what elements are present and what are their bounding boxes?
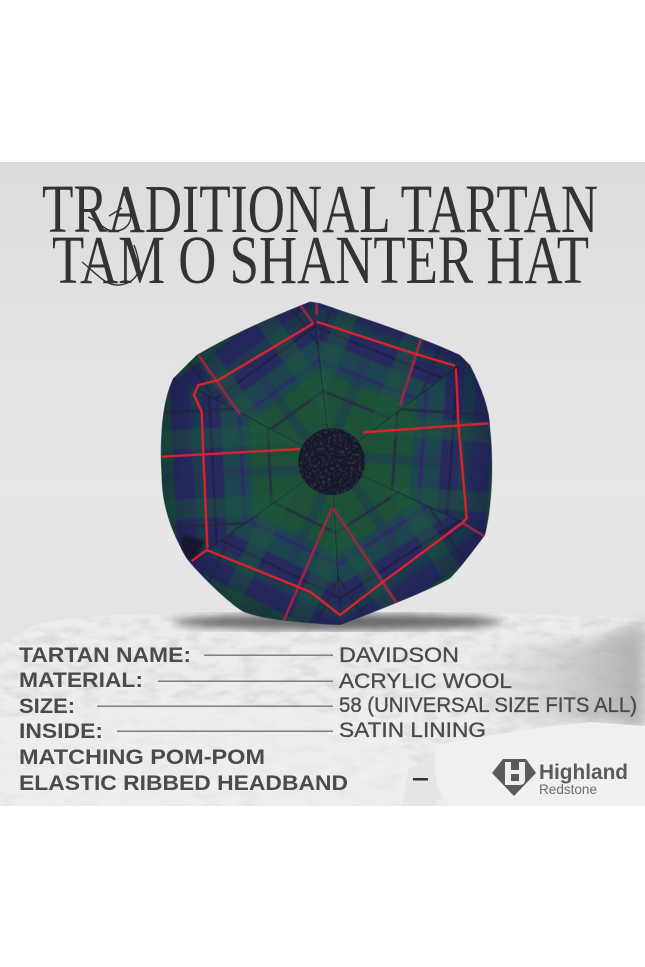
label: inside: INSIDE: <box>19 720 103 743</box>
right shaded rock face <box>501 618 645 726</box>
leader line 2 <box>158 680 333 682</box>
hat shadow <box>173 614 503 630</box>
tartan hat <box>160 302 492 625</box>
wordmark: Highland <box>539 761 628 784</box>
faded red lines <box>198 302 485 622</box>
dark corner <box>180 535 205 562</box>
label: tartan name: TARTAN NAME: <box>19 644 191 667</box>
logo <box>492 759 628 797</box>
sub wordmark: Redstone <box>539 781 597 797</box>
red lines <box>162 322 488 615</box>
leader line 3 <box>97 706 333 707</box>
value: acrylic wool: ACRYLIC WOOL <box>339 670 512 693</box>
edge shading <box>150 295 500 635</box>
title <box>42 171 598 298</box>
feature: headband: ELASTIC RIBBED HEADBAND <box>19 772 348 795</box>
rock texture <box>0 610 645 806</box>
icon: diamond H <box>492 759 536 796</box>
gap between rocks <box>404 771 410 802</box>
panel creases <box>195 322 465 617</box>
front left rock <box>0 700 412 806</box>
pom-pom <box>298 428 365 495</box>
value: Davidson: DAVIDSON <box>339 644 459 667</box>
photo backdrop <box>0 162 645 806</box>
infographic canvas <box>0 162 645 806</box>
stone plinth <box>0 610 645 806</box>
leader line 4 <box>117 730 333 732</box>
feature: pom-pom: MATCHING POM-POM <box>19 746 265 769</box>
label: size: SIZE: <box>19 695 75 718</box>
leader line 1 <box>204 654 333 656</box>
black gap detail <box>413 778 428 780</box>
label: material: MATERIAL: <box>19 669 143 692</box>
value: size: 58 (UNIVERSAL SIZE FITS ALL) <box>339 694 637 717</box>
spec rows <box>19 644 637 795</box>
front right rock <box>435 722 645 806</box>
hat panels <box>160 302 492 625</box>
upper rock slab <box>0 611 645 806</box>
title swashes <box>82 190 139 285</box>
value: satin lining: SATIN LINING <box>339 719 486 742</box>
